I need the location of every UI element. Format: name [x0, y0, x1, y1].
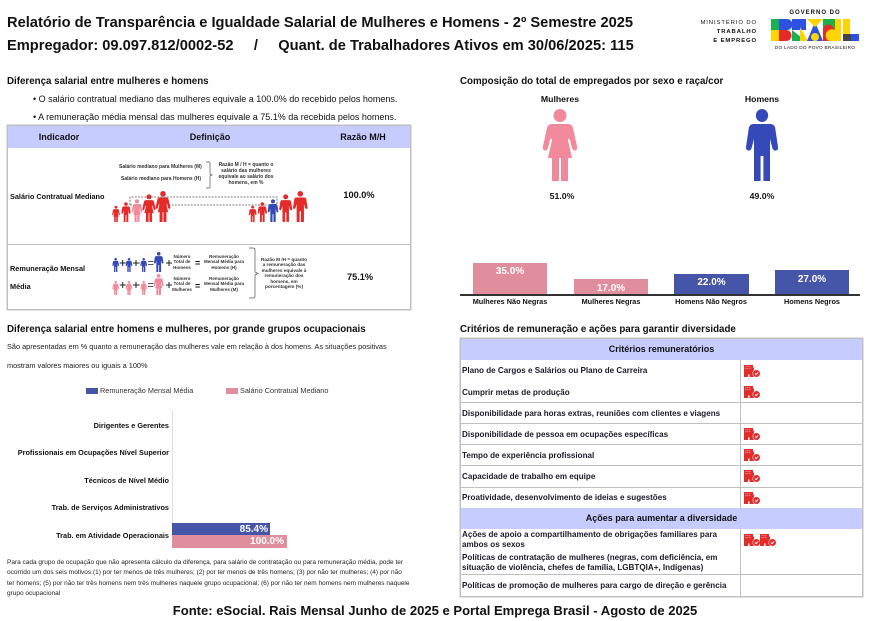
row label: remuneração: Remuneração Mensal — [10, 264, 85, 273]
panel: indicator table — [7, 125, 411, 310]
heading: composição: Composição do total de empregados por sexo e raça/cor — [460, 76, 723, 87]
intro text — [7, 342, 387, 370]
panel: criteria table: Cumprir metas de produção — [462, 388, 570, 397]
bar: salário 100.0%: 100.0% — [250, 536, 284, 547]
column: homens negros: 27.0% — [798, 274, 826, 285]
employer line: Empregador: 09.097.812/0002-52 / Quant. de Trabalhadores Ativos em 30/06/2025: 115 — [7, 38, 634, 54]
value: 75.1%: 75.1% — [347, 272, 373, 282]
table header: Razão M/H — [340, 132, 386, 142]
bullet text: remuneração média: • A remuneração média mensal das mulheres equivale a 75.1% da recebida pelos homens. — [33, 112, 396, 122]
ratio note: remuneração dos — [264, 273, 304, 278]
definition diagram: salário mediano: equivale ao salário dos — [218, 174, 274, 180]
icon: women: 51.0% — [550, 191, 574, 201]
family icons: mulheres e homens — [112, 191, 308, 222]
icon: men: Homens — [745, 94, 779, 104]
men total: Número — [173, 254, 190, 259]
men total: Total de — [174, 259, 190, 264]
value: 100.0%: 100.0% — [343, 190, 375, 200]
icons: company check — [744, 365, 776, 546]
bar: remuneração 85.4% — [172, 523, 270, 535]
logo: governo do brasil: DO LADO DO POVO BRASILEIRO — [775, 45, 855, 50]
ratio note: mulheres equivale à — [262, 268, 306, 273]
column chart — [460, 263, 860, 306]
section header: ações: Ações para aumentar a diversidade — [586, 513, 737, 523]
bar chart: occupational groups: Trab. de Serviços Administrativos — [52, 503, 169, 512]
ratio note — [261, 257, 307, 289]
table header: Definição — [190, 132, 230, 142]
column chart: Mulheres Não Negras — [473, 297, 547, 306]
men remuneration: Remuneração — [209, 254, 239, 259]
women total: Número — [173, 276, 190, 281]
men total — [173, 254, 191, 270]
heading: critérios: Critérios de remuneração e ações para garantir diversidade — [460, 324, 736, 335]
bar chart: occupational groups — [18, 410, 287, 548]
equals men: = — [195, 258, 200, 268]
intro text: São apresentadas em % quanto a remuneração das mulheres vale em relação à dos homens. As situações positivas — [7, 342, 387, 351]
column chart: Homens Negros — [784, 297, 840, 306]
ratio note: a remuneração das — [263, 262, 305, 267]
column divider — [740, 360, 741, 508]
logo: governo do brasil — [771, 10, 859, 50]
definition diagram: salário mediano: homens, em % — [228, 180, 264, 186]
column: homens não negros: 22.0% — [697, 277, 726, 288]
panel: criteria table: Ações de apoio a compartilhamento de obrigações familiares para — [462, 530, 717, 539]
column: homens negros — [775, 270, 849, 294]
logo: governo do brasil: GOVERNO DO — [789, 10, 841, 16]
section header: ações — [461, 508, 862, 529]
women total: Total de — [174, 281, 190, 286]
icon: men — [745, 94, 779, 201]
definition diagram: salário mediano: Salário mediano para Homens (H) — [121, 176, 201, 182]
definition diagram: salário mediano: Razão M / H = quanto o — [219, 162, 273, 168]
panel: criteria table: Tempo de experiência profissional — [462, 451, 594, 460]
men remuneration — [204, 254, 244, 270]
women remuneration — [204, 276, 244, 292]
row label: salário: Salário Contratual Mediano — [10, 192, 104, 201]
panel: criteria table: Políticas de contratação de mulheres (negras, com deficiência, em — [462, 553, 717, 562]
footnote — [7, 559, 410, 597]
table header — [8, 126, 410, 148]
legend: Salário Contratual Mediano — [240, 386, 328, 395]
footnote: ocorrido um dos seis motivos:(1) por ter menos de três mulheres; (2) por ter menos de três homens; (3) por não ter mulheres; (4) por não — [7, 569, 402, 576]
equals women: = — [195, 281, 200, 291]
legend: Remuneração Mensal Média — [100, 386, 193, 395]
women remuneration: Mensal Média para — [204, 281, 244, 286]
icon: men: 49.0% — [750, 191, 774, 201]
logo: ministério: MINISTÉRIO DO — [700, 20, 757, 26]
bar: remuneração 85.4%: 85.4% — [240, 524, 268, 535]
heading: grupos ocupacionais: Diferença salarial entre homens e mulheres, por grande grupos ocupacionais — [7, 324, 366, 335]
brace — [249, 248, 259, 298]
column: homens não negros — [674, 274, 749, 294]
bar chart: occupational groups: Técnicos de Nível Médio — [84, 476, 169, 485]
footnote: grupo ocupacional — [7, 590, 60, 597]
logo: ministério: TRABALHO — [717, 29, 757, 35]
icon: women: Mulheres — [541, 94, 579, 104]
column: mulheres não negras — [473, 263, 547, 294]
definition diagram: salário mediano — [119, 162, 274, 188]
panel: criteria table: Disponibilidade para horas extras, reuniões com clientes e viagens — [462, 409, 720, 418]
women remuneration: Mulheres (M) — [210, 287, 238, 292]
bar chart: occupational groups: Profissionais em Ocupações Nível Superior — [18, 448, 169, 457]
row label: remuneração: Média — [10, 282, 31, 291]
footnote: ter homens; (5) por não ter três homens nem três mulheres naquele grupo ocupacional; (6) por não ter nem homens nem mulheres naquele — [7, 580, 410, 587]
men remuneration: Homens (H) — [211, 265, 237, 270]
logo: ministério: E EMPREGO — [713, 38, 757, 44]
icon: women — [541, 94, 579, 201]
women total — [172, 276, 192, 292]
panel: criteria table — [460, 338, 863, 597]
axis — [460, 294, 860, 296]
men total: Homens — [173, 265, 191, 270]
section header: critérios: Critérios remuneratórios — [609, 344, 714, 354]
column chart: Mulheres Negras — [582, 297, 640, 306]
logo: ministério — [700, 19, 757, 44]
footnote: Para cada grupo de ocupação que não apresenta cálculo da diferença, para salário de contratação ou para remuneração média, pode ter — [7, 559, 403, 566]
column: mulheres negras: 17.0% — [597, 283, 625, 294]
section header: critérios — [461, 339, 862, 360]
title: Relatório de Transparência e Igualdade Salarial de Mulheres e Homens - 2º Semestre 2025 — [7, 15, 633, 31]
panel: criteria table: Proatividade, desenvolvimento de ideias e sugestões — [462, 493, 667, 502]
heading: diferença salarial: Diferença salarial entre mulheres e homens — [7, 76, 209, 87]
bullet text: salário contratual: • O salário contratual mediano das mulheres equivale a 100.0% do recebido pelos homens. — [33, 94, 397, 104]
intro text: mostram valores maiores ou iguais a 100% — [7, 361, 148, 370]
bar chart: occupational groups: Trab. em Atividade Operacionais — [56, 531, 169, 540]
panel: criteria table: ambos os sexos — [462, 540, 525, 549]
women remuneration: Remuneração — [209, 276, 239, 281]
row label: remuneração — [10, 264, 85, 291]
ratio note: Razão M /H = quanto — [261, 257, 307, 262]
formula icons — [112, 252, 172, 295]
panel: criteria table: Disponibilidade de pessoa em ocupações específicas — [462, 430, 668, 439]
legend — [86, 386, 328, 395]
bar: salário 100.0% — [172, 535, 287, 548]
column chart: Homens Não Negros — [675, 297, 747, 306]
men remuneration: Mensal Média para — [204, 259, 244, 264]
column: mulheres não negras: 35.0% — [496, 266, 524, 277]
category labels: Dirigentes e Gerentes — [94, 421, 169, 430]
ratio note: porcentagem (%) — [265, 284, 303, 289]
criteria labels: Plano de Cargos e Salários ou Plano de Carreira — [462, 366, 647, 375]
row divider — [8, 244, 410, 245]
ratio note: homens, em — [270, 279, 298, 284]
source line: Fonte: eSocial. Rais Mensal Junho de 2025 e Portal Emprega Brasil - Agosto de 2025 — [173, 603, 697, 618]
women total: Mulheres — [172, 287, 192, 292]
definition diagram: remuneração — [112, 248, 307, 298]
panel: criteria table: Políticas de promoção de mulheres para cargo de direção e gerência — [462, 581, 726, 590]
definition diagram: salário mediano: salário das mulheres — [221, 168, 271, 174]
definition diagram: salário mediano: Salário mediano para Mulheres (M) — [119, 164, 202, 170]
panel: criteria table: situação de violência, chefes de família, LGBTQIA+, Indígenas) — [462, 563, 703, 572]
row dividers — [461, 402, 862, 403]
table header: Indicador — [39, 132, 79, 142]
column: mulheres negras — [574, 279, 648, 294]
panel: criteria table: Capacidade de trabalho em equipe — [462, 472, 595, 481]
